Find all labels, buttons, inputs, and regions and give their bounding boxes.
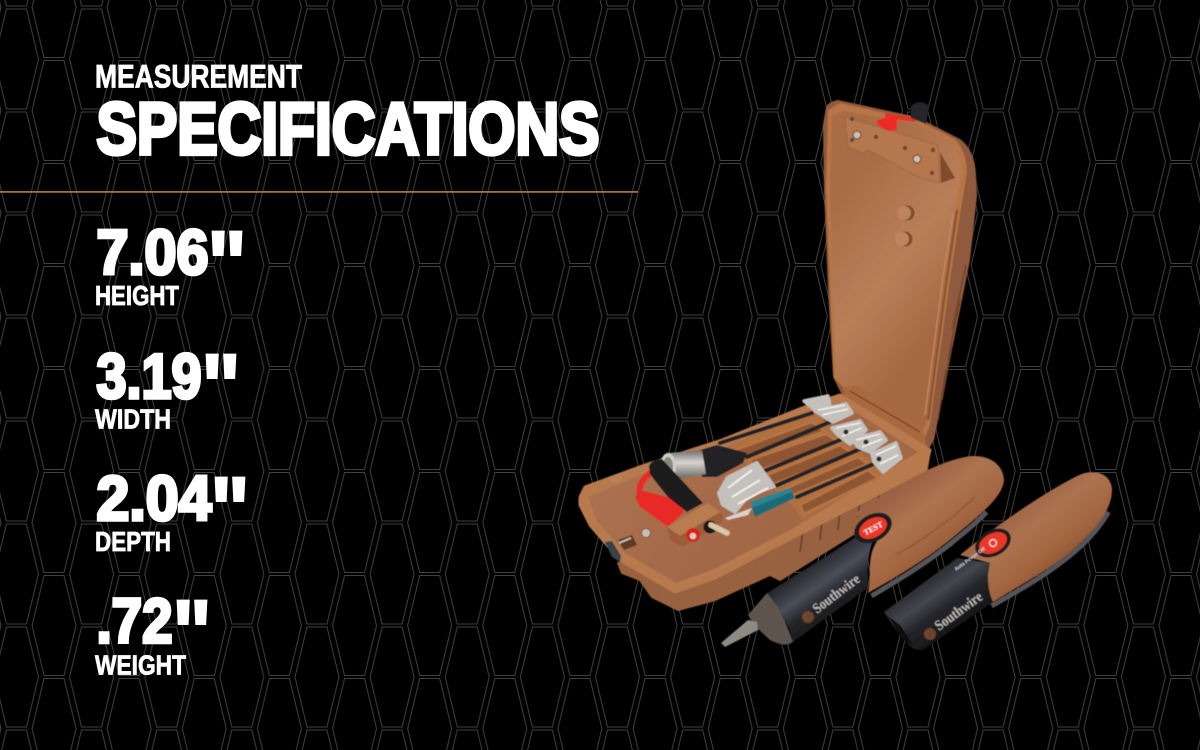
wand black nose <box>884 558 993 650</box>
title line: measurement: MEASUREMENT <box>95 58 302 94</box>
ribs on side wall <box>800 464 914 552</box>
tone tracer probe <box>721 456 1004 647</box>
hinge bar <box>843 385 927 448</box>
spec: weight <box>95 580 212 685</box>
black cables <box>720 413 878 497</box>
probe logo <box>802 611 814 623</box>
black knob <box>911 102 929 124</box>
probe brown grip <box>855 456 1004 593</box>
value: width: 3.19 <box>96 342 202 412</box>
lip tab <box>608 473 623 483</box>
side slot on lid <box>928 210 957 420</box>
wand brown grip <box>960 472 1112 602</box>
cable trays <box>727 412 884 520</box>
coax connector <box>660 445 747 481</box>
title <box>95 58 600 170</box>
inch mark: depth: " <box>210 457 250 562</box>
probe underside <box>872 512 986 596</box>
latch slot <box>618 535 637 550</box>
test button: TEST <box>862 519 885 537</box>
power button <box>970 523 1016 563</box>
clear rj45 plug <box>718 462 775 520</box>
label: width: WIDTH <box>95 404 171 434</box>
wand brand text: Southwire <box>932 589 986 634</box>
spec: width <box>95 334 241 439</box>
teal connector <box>750 488 795 517</box>
outer ribs <box>938 265 966 420</box>
test button <box>849 507 897 549</box>
tray block backing <box>727 412 884 520</box>
base: case tray <box>580 395 930 610</box>
label: weight: WEIGHT <box>95 650 186 680</box>
wand logo <box>924 628 936 640</box>
divider line <box>0 191 638 193</box>
side label <box>605 541 621 562</box>
inch mark: width: " <box>201 334 241 439</box>
inch mark: weight: " <box>172 580 212 685</box>
binding post block <box>667 503 727 547</box>
value: height: 7.06 <box>96 218 208 288</box>
lid: opened case lid <box>823 100 977 452</box>
clear rj45 connectors <box>804 396 901 472</box>
product photo: tone generator kit <box>580 100 1112 650</box>
title line: specifications: SPECIFICATIONS <box>96 89 600 170</box>
probe brand text: Southwire <box>810 571 864 617</box>
lid screws <box>850 117 935 175</box>
wand end slots <box>888 616 913 645</box>
black socket with pin <box>704 520 716 534</box>
red alligator clip <box>635 468 684 527</box>
red slide switch <box>877 113 917 131</box>
screw <box>642 528 650 538</box>
probe metal tip <box>721 620 758 647</box>
black alligator clip <box>649 459 703 512</box>
value: depth: 2.04 <box>96 464 212 534</box>
label: depth: DEPTH <box>95 526 171 557</box>
inch mark: height: " <box>207 211 247 316</box>
probe black nose <box>767 533 874 642</box>
auto power off label: Auto Power Off <box>954 546 987 573</box>
lid pegs <box>895 206 914 246</box>
value: weight: .72 <box>96 586 172 656</box>
label: height: HEIGHT <box>95 280 179 311</box>
red socket <box>686 528 700 542</box>
probe clear cone <box>748 593 793 645</box>
spec: height <box>95 211 247 316</box>
spec: depth <box>95 457 250 562</box>
tone generator wand <box>884 472 1112 650</box>
wand underside <box>992 512 1108 606</box>
